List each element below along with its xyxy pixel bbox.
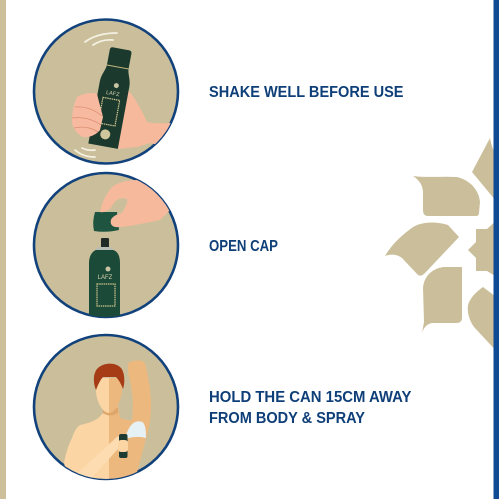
bottle: LAFZ — [106, 90, 121, 98]
raised arm and right torso — [109, 360, 151, 480]
step 3 heading: HOLD THE CAN 15CM AWAY — [209, 389, 412, 406]
hand — [100, 180, 170, 228]
left tan bar — [0, 0, 6, 499]
step 2 heading: OPEN CAP — [209, 238, 278, 255]
nozzle — [101, 238, 109, 248]
step 2 illustration: open cap — [34, 173, 182, 320]
hair — [94, 364, 124, 390]
left torso — [64, 412, 109, 480]
face — [96, 378, 109, 413]
motion lines — [75, 33, 117, 157]
decorative flower motif — [385, 138, 494, 348]
hand palm and wrist — [118, 90, 171, 149]
spray cloud — [125, 421, 146, 439]
step 3 illustration: spray — [34, 335, 178, 480]
bottle — [89, 250, 120, 320]
step 3 heading — [209, 389, 412, 427]
neck shadow — [103, 408, 118, 416]
step 3 heading: FROM BODY & SPRAY — [209, 410, 366, 427]
silver collar — [96, 247, 113, 250]
right blue bar — [494, 0, 499, 499]
step 1 heading: SHAKE WELL BEFORE USE — [209, 84, 404, 101]
forearm — [78, 436, 119, 478]
spray can — [119, 434, 128, 458]
step 2 illustration: open cap: LAFZ — [98, 275, 113, 281]
step 1 illustration: shake — [34, 20, 180, 164]
fist with fingers — [72, 93, 103, 137]
cap — [93, 212, 119, 232]
hand on can — [118, 440, 128, 452]
